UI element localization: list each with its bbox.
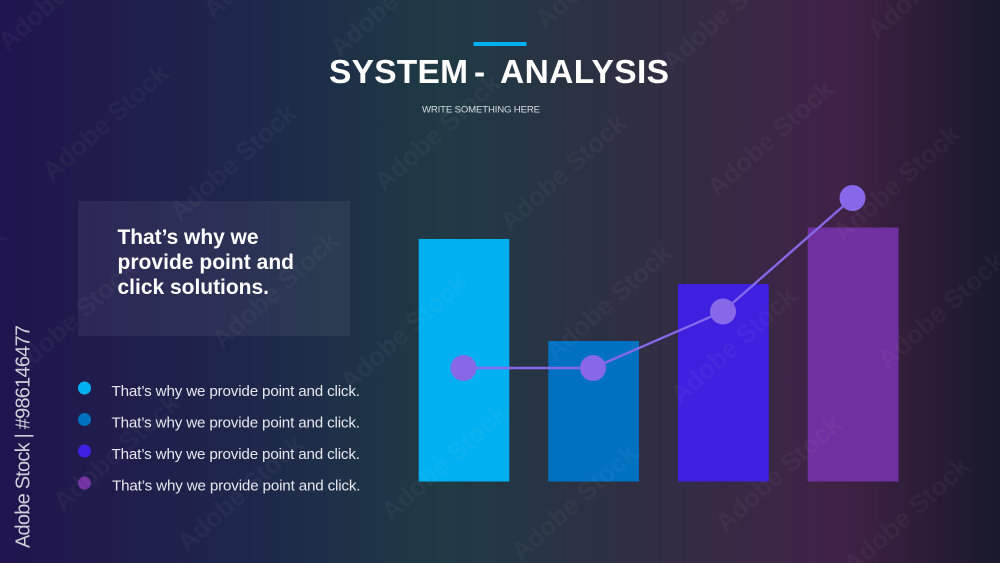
watermarks: Adobe Stock bbox=[827, 118, 966, 247]
watermarks: Adobe Stock bbox=[375, 397, 514, 526]
callout text: provide point and bbox=[118, 251, 294, 274]
watermarks: Adobe Stock bbox=[36, 57, 175, 186]
callout text: click solutions. bbox=[118, 276, 269, 299]
watermarks: Adobe Stock bbox=[171, 428, 310, 557]
watermarks: Adobe Stock bbox=[505, 437, 644, 563]
watermarks: Adobe Stock bbox=[334, 267, 473, 396]
trend line bbox=[464, 198, 852, 368]
callout text: That’s why we bbox=[118, 226, 258, 249]
watermarks: Adobe Stock bbox=[701, 73, 840, 202]
bar 3 bbox=[678, 284, 769, 482]
watermarks: Adobe Stock bbox=[47, 387, 186, 516]
watermarks: Adobe Stock bbox=[206, 225, 345, 354]
watermarks: Adobe Stock bbox=[664, 280, 803, 409]
legend item 3: That’s why we provide point and click. bbox=[112, 446, 360, 463]
legend bbox=[78, 382, 360, 494]
subtitle: WRITE SOMETHING HERE bbox=[422, 104, 540, 116]
bar 4 bbox=[808, 228, 898, 482]
watermarks: Adobe Stock bbox=[164, 97, 303, 226]
trend points bbox=[450, 185, 866, 381]
watermarks: Adobe Stock bbox=[4, 253, 143, 382]
bar 1 bbox=[419, 239, 509, 482]
legend item 2: That’s why we provide point and click. bbox=[112, 414, 360, 432]
watermarks: Adobe Stock bbox=[368, 67, 507, 196]
title: - bbox=[474, 54, 485, 91]
legend item 4: That’s why we provide point and click. bbox=[112, 478, 360, 494]
vertical stock label: Adobe Stock | #986146477 bbox=[12, 325, 34, 548]
watermarks: Adobe Stock bbox=[539, 237, 678, 366]
watermarks: Adobe Stock bbox=[494, 107, 633, 236]
accent bar bbox=[474, 42, 526, 46]
bar 2 bbox=[548, 341, 639, 482]
watermarks: Adobe Stock bbox=[709, 408, 848, 537]
legend item 1: That’s why we provide point and click. bbox=[112, 383, 360, 400]
panel: callout bbox=[78, 201, 350, 336]
bar chart bbox=[419, 185, 898, 482]
title: ANALYSIS bbox=[500, 54, 669, 91]
title: SYSTEM bbox=[329, 54, 468, 91]
